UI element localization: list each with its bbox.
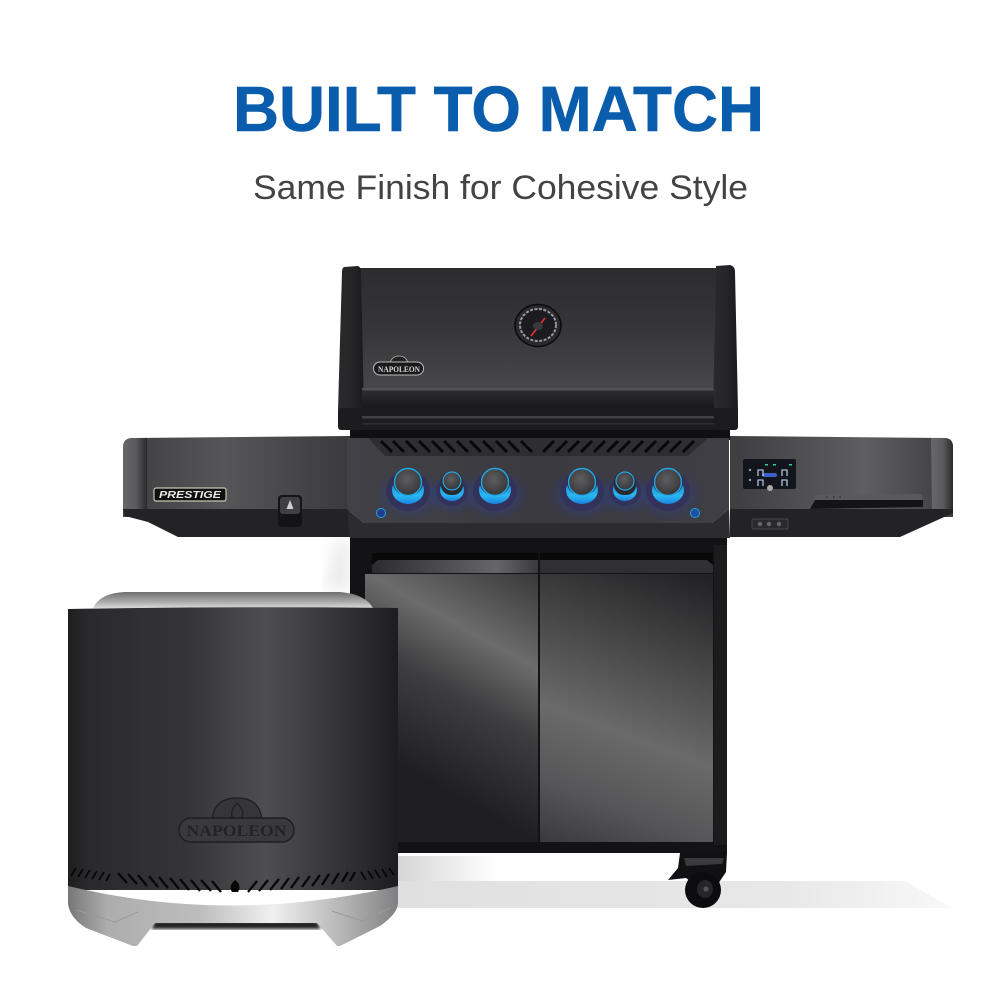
title: BUILT TO MATCH: [233, 73, 764, 145]
flame icon: [231, 880, 239, 892]
lid side caps: [338, 266, 364, 410]
shelf tool rail: [810, 494, 923, 509]
knob 1: [386, 468, 430, 511]
knob 3: [473, 468, 517, 511]
napoleon lid logo: [374, 356, 424, 375]
embossed logo: [179, 798, 294, 842]
subtitle: Same Finish for Cohesive Style: [253, 169, 748, 207]
steel base ring: [68, 886, 398, 946]
lid lower lip: [362, 389, 714, 411]
vent slots: [368, 438, 708, 456]
embossed logo: NAPOLEON: [186, 823, 287, 840]
prestige badge: [154, 488, 226, 501]
left side shelf: [123, 436, 350, 537]
floor shadow: [325, 540, 952, 908]
lid: [338, 265, 738, 440]
door handle: [372, 553, 713, 573]
grill cart: [350, 538, 727, 853]
left door: [365, 574, 538, 842]
temperature gauge: [515, 304, 561, 346]
knob 6: [646, 468, 690, 511]
grill: [123, 265, 953, 908]
rim: [93, 592, 373, 608]
fire pit body: [68, 607, 398, 890]
knob 2: [436, 472, 468, 506]
ports: [752, 519, 788, 529]
left indicator button: [376, 508, 386, 518]
napoleon lid logo: NAPOLEON: [378, 365, 420, 374]
knob 4: [560, 468, 604, 511]
knob 5: [609, 472, 641, 506]
prestige badge: PRESTIGE: [159, 490, 221, 501]
right side shelf: [730, 436, 953, 537]
control panel: [347, 438, 730, 538]
lid face: [358, 268, 716, 390]
steel ring panel lines: [76, 908, 390, 922]
notch shadow: [151, 921, 321, 929]
right door: [540, 574, 713, 842]
glow halos: [373, 469, 445, 521]
rotisserie switch: [278, 495, 302, 527]
caster wheel: [668, 853, 727, 908]
right indicator button: [690, 508, 700, 518]
vent slots: [118, 872, 355, 892]
digital display: [743, 459, 796, 491]
fire pit: [68, 592, 398, 946]
